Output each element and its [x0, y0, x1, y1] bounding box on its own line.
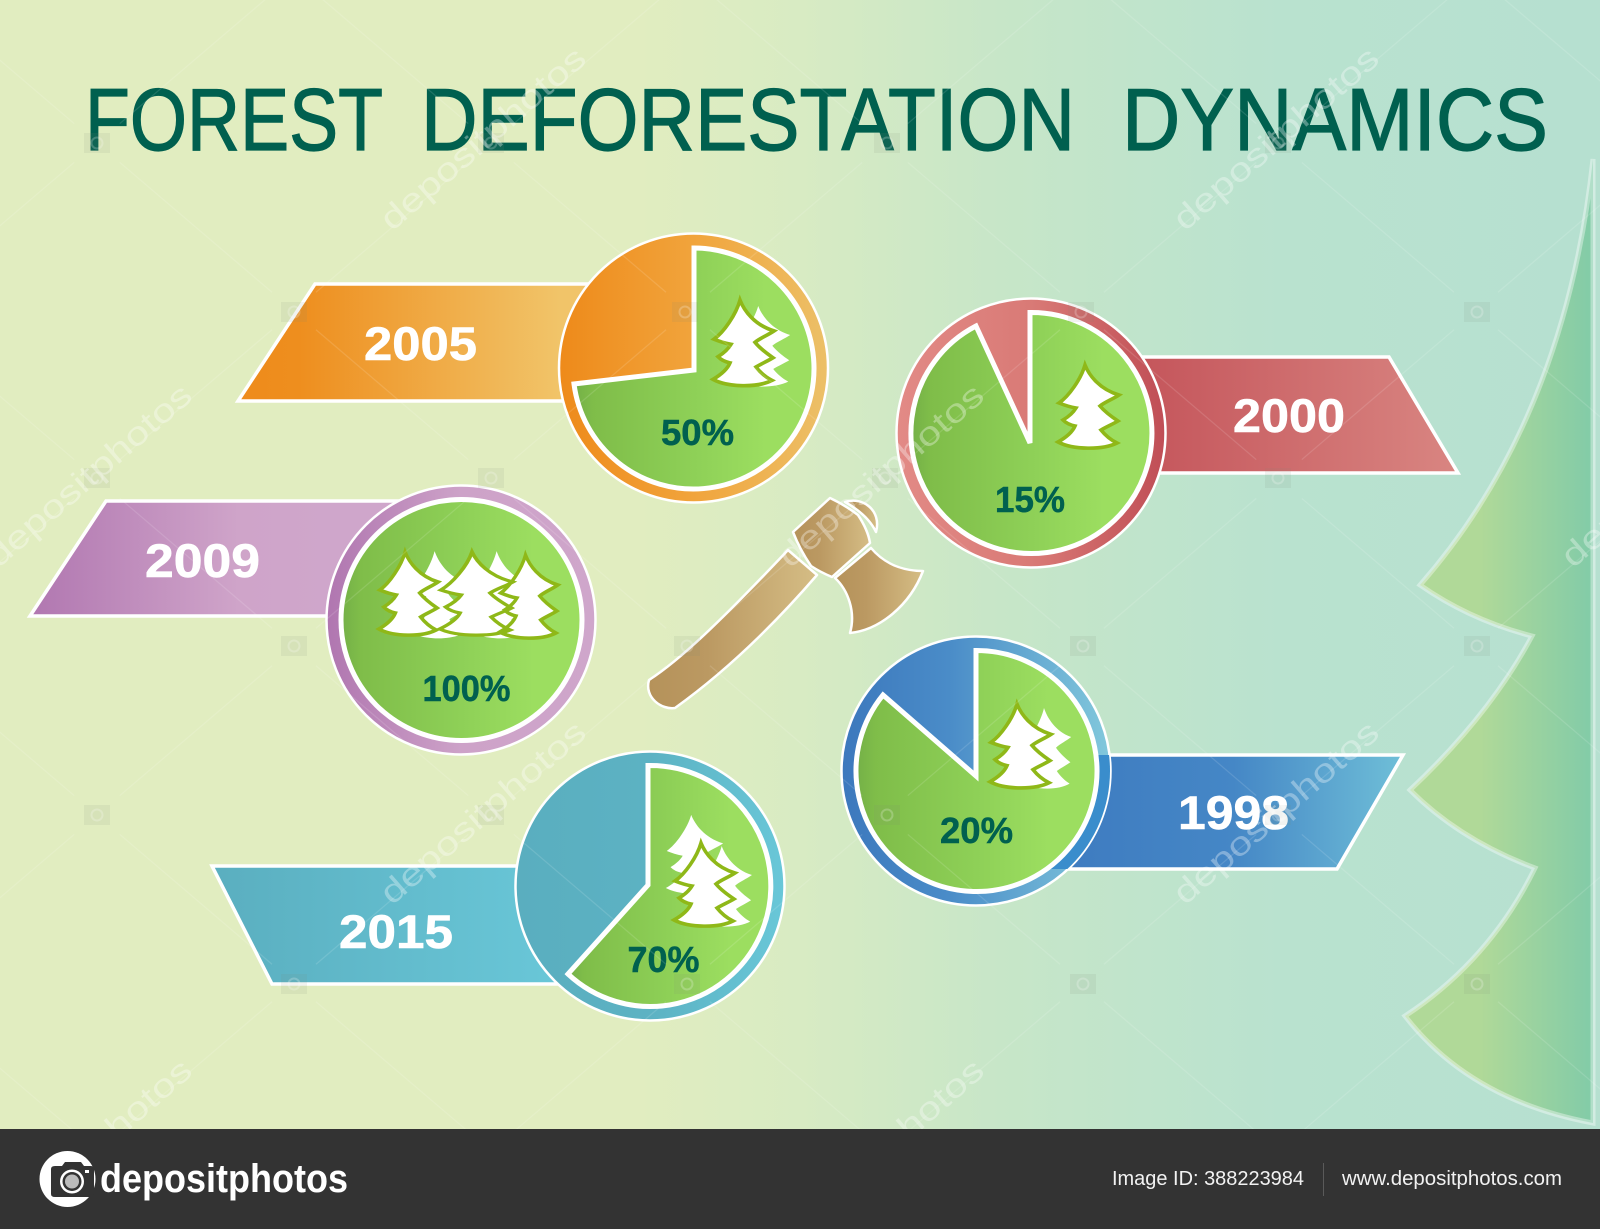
big decorative fir tree on right edge [1405, 159, 1593, 1123]
year label 1998: 1998 [1178, 786, 1289, 839]
ring: 2005 [559, 234, 828, 502]
axe handle [648, 550, 817, 708]
icon: trees 100% [379, 551, 558, 638]
pie sector 20% [856, 650, 1097, 891]
pie sector 15% [911, 312, 1152, 553]
axe blade [835, 548, 923, 633]
icon: trees 70% [666, 815, 752, 927]
pie sector 50% [574, 248, 814, 489]
percent 20%: 20% [940, 810, 1013, 851]
watermark text: depositphotos [770, 376, 991, 574]
year label 2009: 2009 [145, 534, 260, 587]
banner: 2015 [212, 866, 600, 984]
icon: camera logo [40, 1151, 96, 1207]
title: DYNAMICS [1122, 70, 1548, 169]
watermark text: depositphotos [372, 39, 593, 237]
axe poll [845, 501, 877, 532]
banner: 2009 [30, 501, 400, 616]
image id: Image ID: 388223984 [1112, 1168, 1304, 1190]
watermark text: depositphotos [1165, 713, 1386, 911]
watermark text: depositphotos [1165, 39, 1386, 237]
ring: 2009 [326, 486, 596, 754]
panel: 2015 [212, 752, 784, 1020]
pie full circle 100% [341, 500, 582, 740]
icon: trees 50% [713, 300, 790, 387]
ring: 2000 [896, 298, 1166, 568]
footer bar [0, 1129, 1600, 1229]
panel: 1998 [842, 636, 1403, 906]
icon: axe [648, 498, 923, 708]
watermark camera icons [84, 133, 1490, 994]
percent 100%: 100% [422, 668, 510, 709]
panel: 2000 [896, 298, 1458, 568]
website: www.depositphotos.com [1341, 1168, 1562, 1190]
ring: 2015 [516, 752, 784, 1020]
title [85, 70, 1548, 169]
ring: 1998 [842, 636, 1110, 906]
banner: 2005 [238, 284, 640, 401]
watermark text: depositphotos [372, 713, 593, 911]
year label 2015: 2015 [339, 905, 453, 958]
percent 50%: 50% [661, 412, 734, 453]
panel: 2009 [30, 486, 596, 754]
percent 70%: 70% [628, 939, 700, 980]
axe head block [793, 498, 870, 577]
banner: 1998 [1040, 755, 1403, 869]
percent 15%: 15% [995, 479, 1065, 520]
logo wordmark: depositphotos [100, 1157, 348, 1201]
icon: trees 20% [990, 704, 1071, 789]
pie sector 70% [568, 765, 771, 1006]
ring overlap with banner [1051, 755, 1110, 869]
panel: 2005 [238, 234, 828, 502]
title: FOREST [85, 70, 383, 169]
year label 2005: 2005 [364, 317, 477, 370]
icon: tree 15% [1058, 365, 1119, 448]
year label 2000: 2000 [1233, 389, 1345, 442]
title: DEFORESTATION [421, 70, 1075, 169]
banner: 2000 [1100, 357, 1458, 473]
